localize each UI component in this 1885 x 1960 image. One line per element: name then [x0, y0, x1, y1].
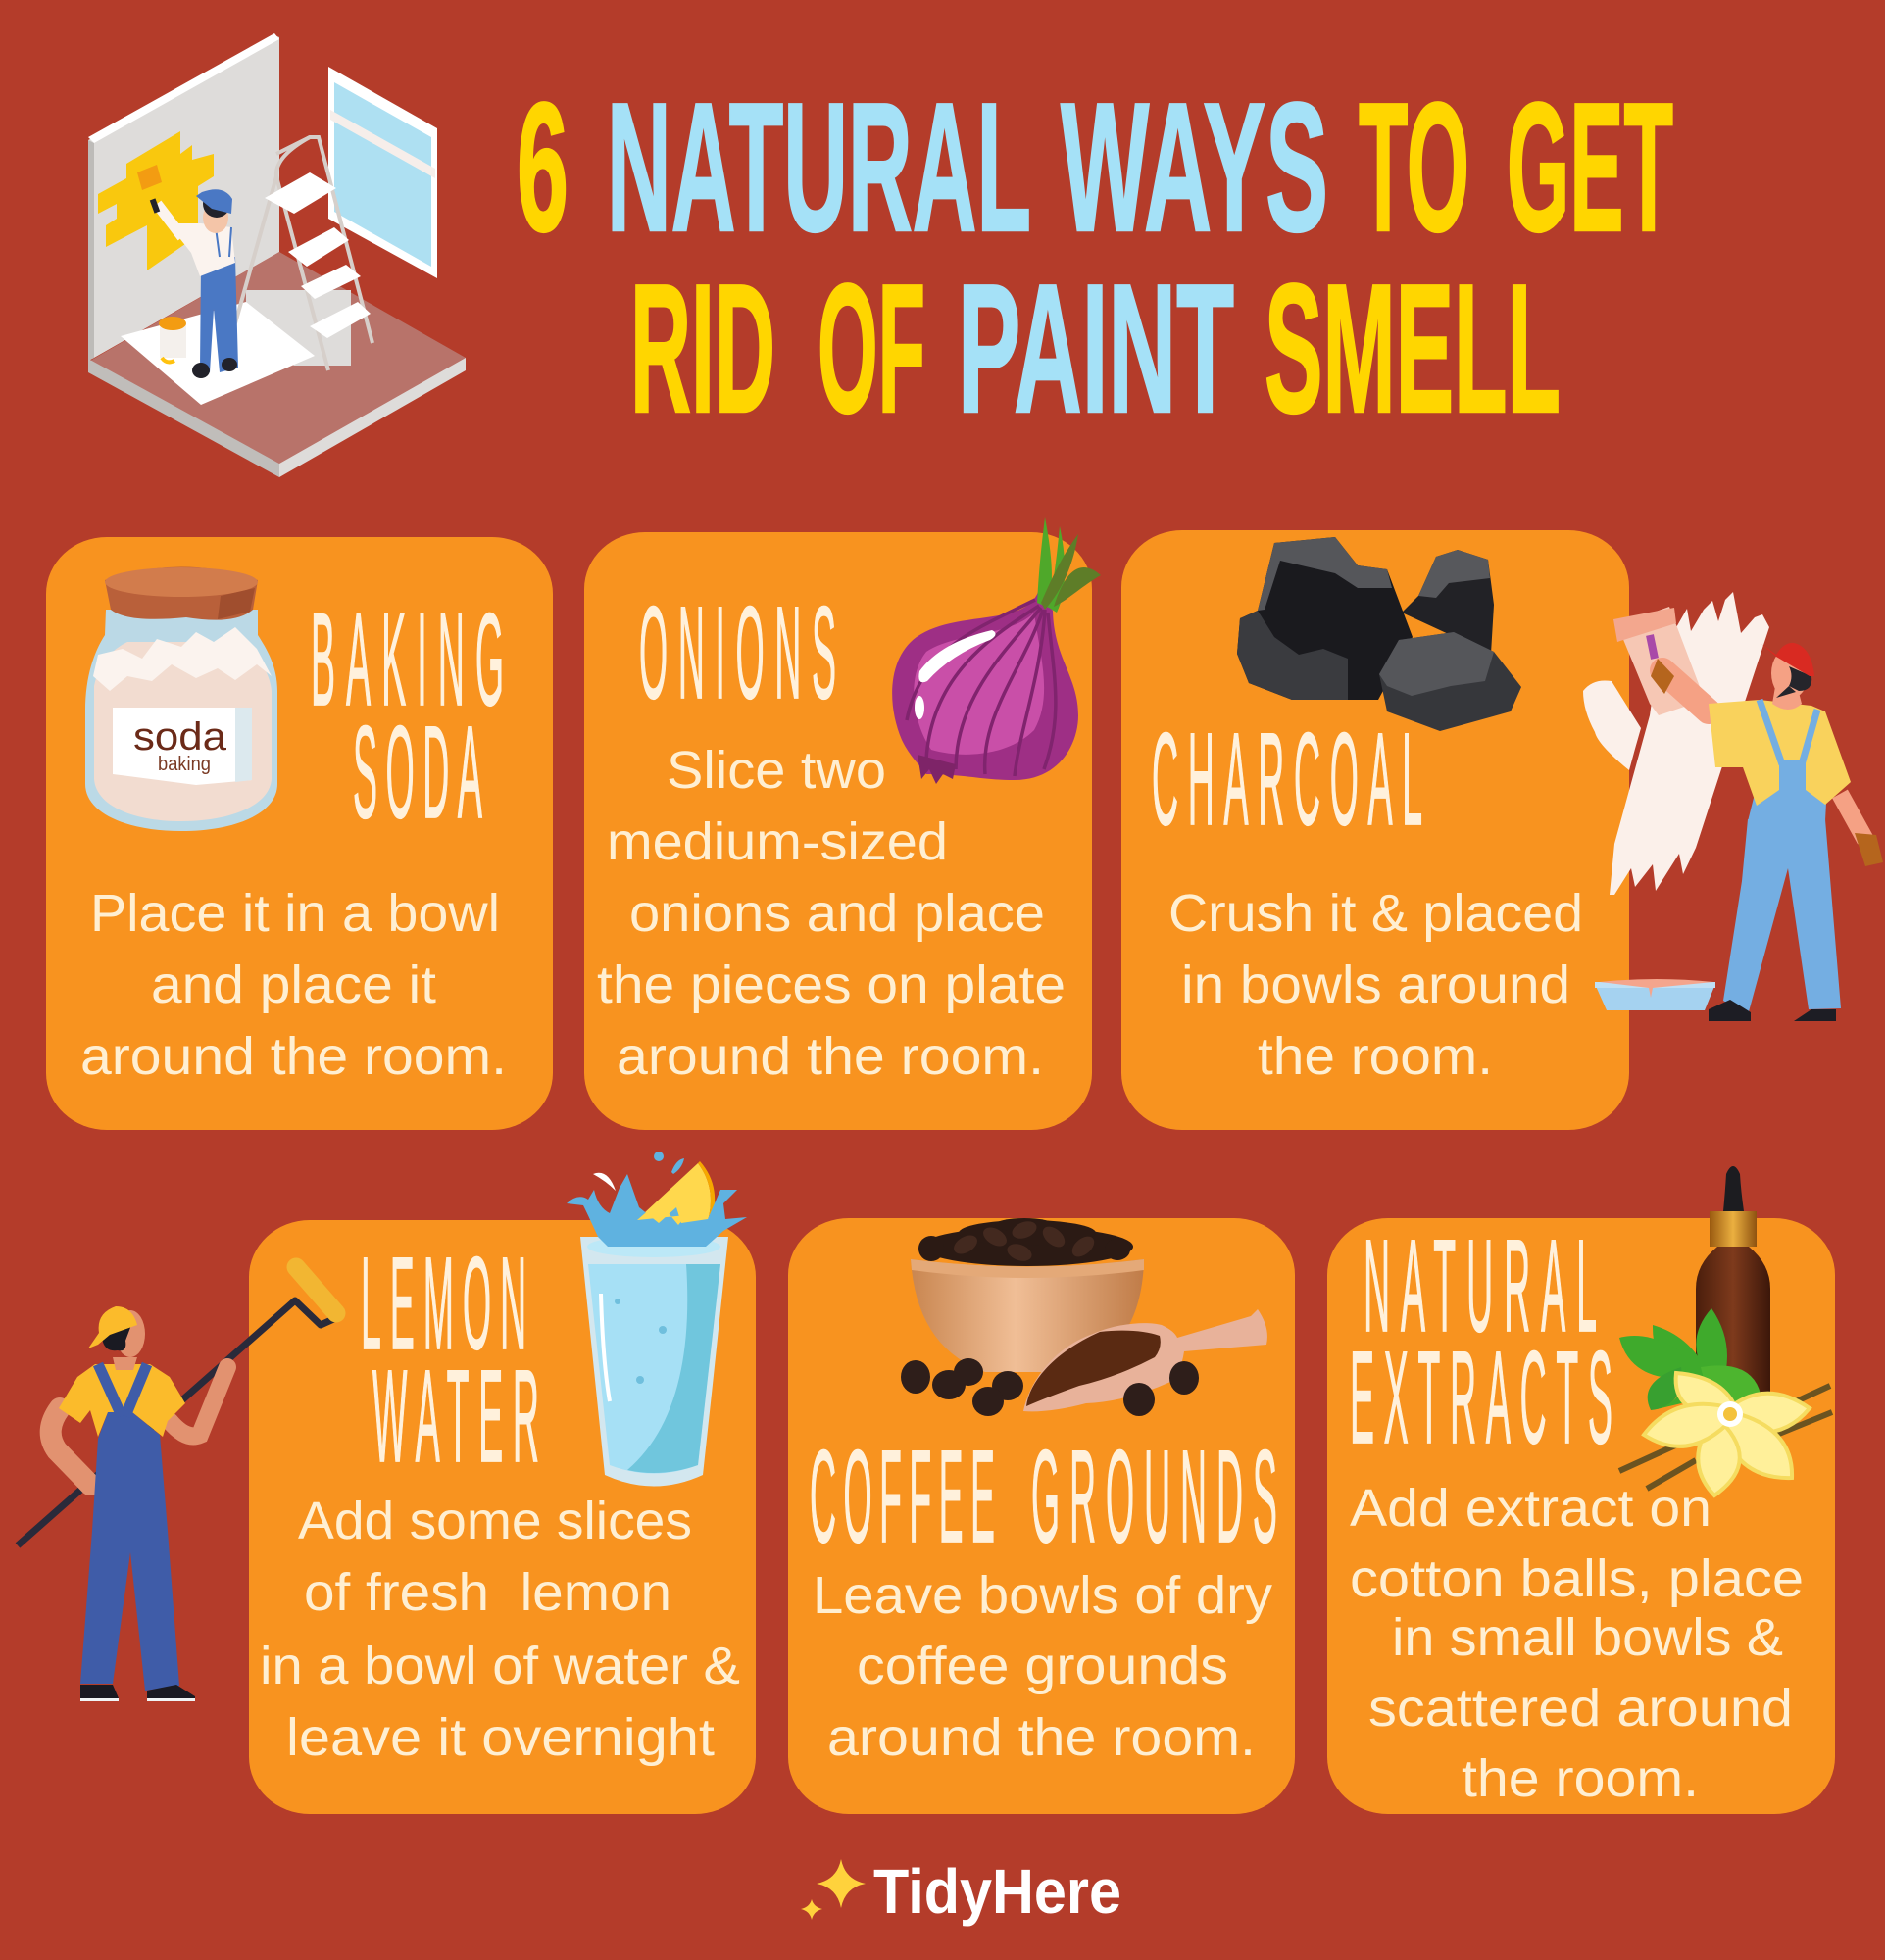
jar label text: soda [133, 715, 227, 759]
body text [813, 1566, 1272, 1767]
body text: in bowls around [1181, 956, 1570, 1014]
roller pole [18, 1300, 340, 1545]
coffee scoop [1023, 1309, 1267, 1411]
icon: glass of water with lemon [567, 1152, 747, 1486]
illustration: painter on the right with paint strokes [1583, 592, 1883, 1021]
heading: CHARCOAL [1152, 706, 1422, 853]
card background [249, 1220, 756, 1814]
onion leaves [1037, 517, 1101, 612]
body text: and place it [151, 956, 436, 1014]
body text: Slice two [667, 741, 886, 800]
title: SMELL [1265, 246, 1561, 451]
body text: leave it overnight [286, 1708, 715, 1767]
heading [1350, 1212, 1612, 1471]
body text: cotton balls, place [1350, 1549, 1804, 1608]
illustration: painter on the left with roller [18, 1267, 340, 1701]
title: PAINT [958, 246, 1234, 451]
body text: the room. [1258, 1027, 1493, 1086]
wordmark: TidyHere [873, 1856, 1121, 1927]
panel: natural extracts [1327, 1166, 1835, 1814]
vanilla flower [1644, 1373, 1810, 1495]
icon: baking soda jar [85, 566, 277, 831]
logo: TidyHere [801, 1856, 1121, 1927]
body text: around the room. [80, 1027, 507, 1086]
card background [1121, 530, 1629, 1130]
body text: in small bowls & [1392, 1608, 1783, 1667]
title: 6 [517, 65, 569, 270]
title: TO [1359, 65, 1469, 270]
card background [46, 537, 553, 1130]
panel: baking soda [46, 537, 553, 1130]
body text: of fresh lemon [304, 1563, 671, 1622]
title [517, 65, 1673, 451]
body text: scattered around [1368, 1679, 1793, 1738]
panel: lemon water [249, 1152, 756, 1814]
heading [810, 1423, 1277, 1570]
jar label text [133, 715, 227, 775]
title: WAYS [1061, 65, 1328, 270]
paint tray [1595, 979, 1715, 1010]
heading: BAKING [311, 586, 504, 733]
text: GET [1507, 65, 1673, 270]
body text: coffee grounds [857, 1637, 1228, 1695]
paint bucket [159, 317, 186, 362]
jar label text: baking [158, 754, 211, 775]
beans in bowl [918, 1218, 1133, 1266]
heading: SODA [353, 699, 482, 846]
figure [1651, 643, 1883, 1021]
roller [296, 1267, 336, 1313]
heading: LEMON [361, 1230, 526, 1377]
bottle [1696, 1166, 1770, 1395]
heading: WATER [372, 1343, 539, 1490]
title: OF [818, 246, 925, 451]
vanilla pods [1619, 1386, 1832, 1489]
mint leaves [1619, 1308, 1762, 1410]
body text [1168, 884, 1583, 1086]
title: NATURAL [607, 65, 1031, 270]
body text: Add extract on [1350, 1479, 1711, 1538]
heading: GROUNDS [1031, 1423, 1277, 1570]
heading: COFFEE [810, 1423, 995, 1570]
body text [260, 1492, 740, 1767]
lemon wedge [630, 1161, 715, 1227]
paint strokes [1583, 592, 1769, 895]
icon: red onion [892, 517, 1101, 784]
card background [584, 532, 1092, 1130]
body text: Add some slices [298, 1492, 692, 1550]
heading [361, 1230, 539, 1490]
body text [1350, 1479, 1804, 1808]
heading: ONIONS [639, 579, 836, 726]
illustration: isometric room with painter [88, 33, 466, 477]
heading: EXTRACTS [1350, 1324, 1612, 1471]
icon: sparkles [801, 1859, 866, 1920]
title: RID [630, 246, 775, 451]
heading [311, 586, 504, 846]
body text: Place it in a bowl [90, 884, 500, 943]
icon: coffee bowl and scoop [901, 1218, 1267, 1416]
water splash [567, 1152, 747, 1247]
panel: charcoal [1121, 530, 1629, 1130]
body text: the pieces on plate [597, 956, 1066, 1014]
loose beans [901, 1358, 1199, 1416]
body text: in a bowl of water & [260, 1637, 740, 1695]
roller and paint panel [1613, 607, 1705, 715]
body text: around the room. [827, 1708, 1256, 1767]
body text: onions and place [629, 884, 1045, 943]
painter in room [137, 165, 238, 378]
heading: NATURAL [1364, 1212, 1597, 1359]
icon: dropper bottle, mint and vanilla flower [1619, 1166, 1832, 1495]
body text: Leave bowls of dry [813, 1566, 1272, 1625]
panel: onions [584, 517, 1101, 1130]
body text: the room. [1462, 1749, 1699, 1808]
panel: coffee grounds [788, 1218, 1295, 1814]
body text: Crush it & placed [1168, 884, 1583, 943]
body text [597, 741, 1066, 1086]
card background [1327, 1218, 1835, 1814]
figure [51, 1306, 227, 1701]
body text: around the room. [617, 1027, 1044, 1086]
card background [788, 1218, 1295, 1814]
body text [80, 884, 507, 1086]
body text: medium-sized [607, 812, 948, 871]
icon: charcoal [1237, 537, 1521, 731]
